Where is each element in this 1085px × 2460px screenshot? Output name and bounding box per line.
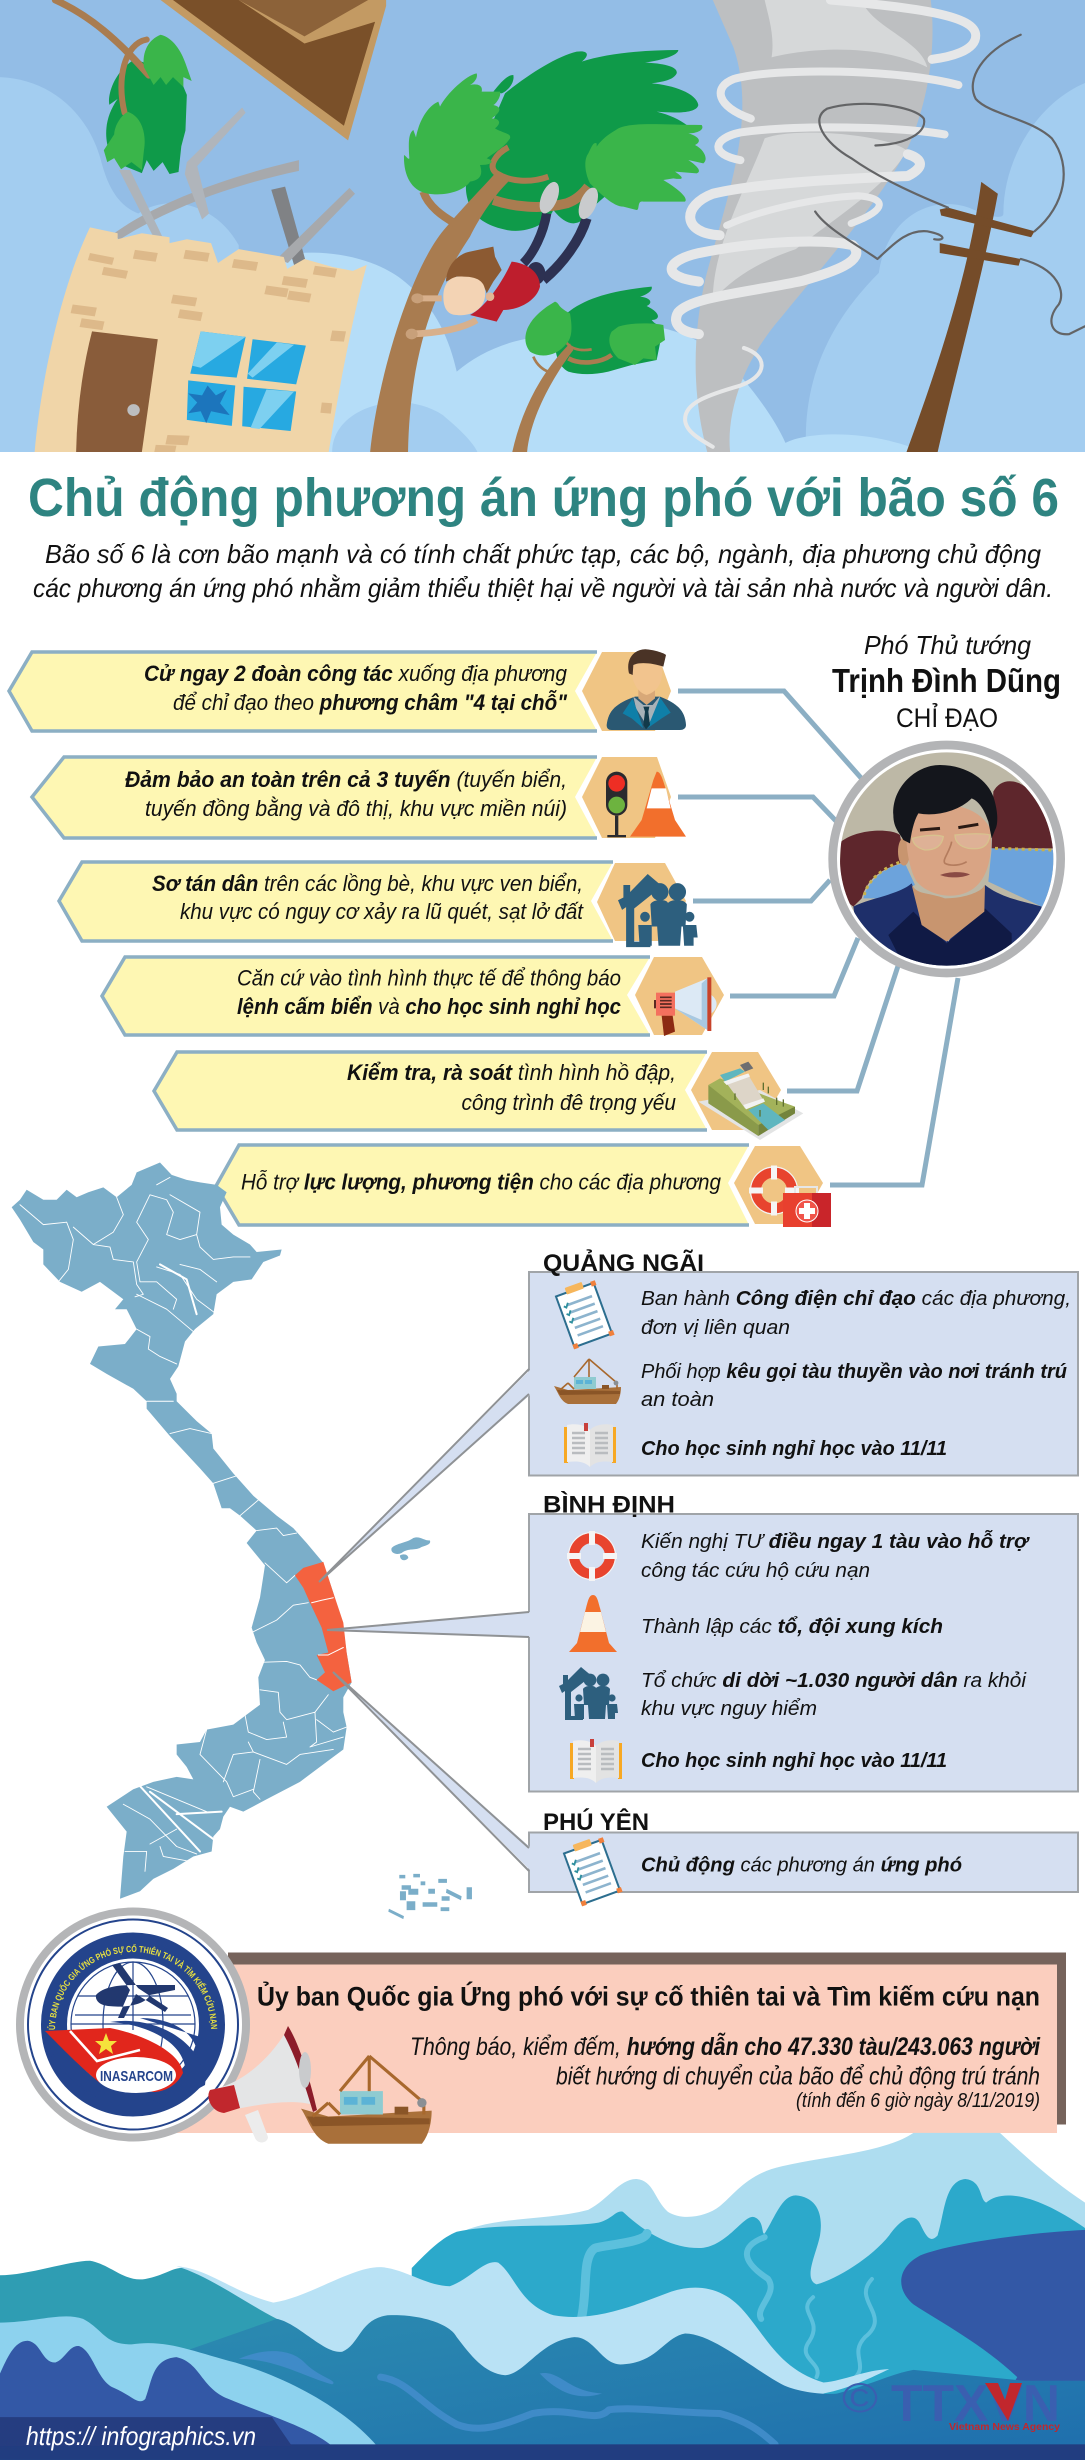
heading: BÌNH ĐỊNH (543, 1490, 675, 1518)
red flag (45, 2028, 183, 2092)
province: Bình Định: công tác cứu hộ cứu nạn (641, 1559, 870, 1582)
province: Bình Định: Thành lập các tổ, đội xung kích (641, 1615, 943, 1638)
Mekong and Red river arms (138, 1264, 222, 1851)
icon: book (570, 1739, 622, 1783)
foam swirls (581, 2234, 875, 2381)
map of Vietnam (12, 1162, 472, 1919)
province: Phú Yên (333, 1672, 1078, 1906)
committee panel (173, 1952, 1066, 2133)
front light wave (176, 2262, 889, 2460)
hexagon (597, 863, 686, 941)
deputy PM heading (832, 630, 1061, 733)
text: Cử ngay 2 đoàn công tác xuống địa phương (144, 661, 567, 686)
action 3 (59, 862, 698, 947)
icon: checklist (553, 1277, 615, 1349)
islands south (388, 1874, 472, 1919)
text: Hỗ trợ lực lượng, phương tiện cho các địa phương (241, 1170, 721, 1194)
helicopter (96, 1963, 175, 2018)
loose wires (815, 35, 1085, 334)
icon: checklist (561, 1834, 623, 1906)
flag stripe (70, 2031, 140, 2061)
info box (529, 1832, 1078, 1892)
broken house (35, 227, 367, 452)
flying roof (161, 0, 386, 140)
action 5 (154, 1052, 803, 1140)
province: Quảng Ngãi: đơn vị liên quan (641, 1316, 790, 1339)
committee panel: (tính đến 6 giờ ngày 8/11/2019) (796, 2090, 1040, 2112)
text: Căn cứ vào tình hình thực tế để thông báo (237, 966, 621, 990)
action 4: lệnh cấm biển và cho học sinh nghỉ học (237, 994, 621, 1019)
utility pole (907, 182, 1035, 452)
icon: family (559, 1667, 618, 1720)
falling person (406, 179, 602, 339)
icon: dam (698, 1062, 803, 1140)
callout wedge (319, 1369, 531, 1582)
left dark wave (0, 2341, 332, 2446)
deputy PM heading: CHỈ ĐẠO (896, 701, 998, 733)
islands north (391, 1537, 430, 1560)
front deep wave (173, 2315, 1085, 2460)
icon: boat (554, 1359, 621, 1404)
dark blue bay (901, 2230, 1085, 2460)
tree: upper left (55, 0, 192, 174)
TTXVN watermark: TTXVN (891, 2375, 1060, 2433)
icon: first aid kit (783, 1187, 831, 1227)
action 1 (9, 649, 686, 731)
icon: family and house (618, 874, 698, 947)
text: Ban hành Công điện chỉ đạo các địa phương, (641, 1287, 1071, 1310)
emblem name: INASARCOM (100, 2068, 173, 2085)
text: Sơ tán dân trên các lồng bè, khu vực ven biển, (152, 871, 583, 896)
province: Quảng Ngãi (319, 1248, 1078, 1582)
clouds (0, 77, 1085, 452)
left teal wave (0, 2261, 346, 2460)
emblem circular text: ỦY BAN QUỐC GIA ỨNG PHÓ SỰ CỐ THIÊN TAI VÀ TÌM KIẾM CỨU NẠN (47, 1944, 218, 2030)
callout wedge (327, 1612, 531, 1637)
hexagon (691, 1052, 781, 1130)
heading: QUẢNG NGÃI (543, 1248, 704, 1277)
icon: official (607, 649, 686, 730)
deputy PM heading: Trịnh Đình Dũng (832, 662, 1061, 699)
highlighted province borders (312, 1598, 343, 1655)
icon: cone (569, 1595, 617, 1652)
hexagon (734, 1146, 823, 1224)
deep swirls (239, 2351, 775, 2444)
yellow star (95, 2033, 117, 2054)
back light wave (415, 2133, 1085, 2460)
action 6 (216, 1145, 831, 1227)
action 3: khu vực có nguy cơ xảy ra lũ quét, sạt lở đất (180, 899, 585, 924)
banner shape (154, 1052, 707, 1130)
province: Quảng Ngãi: an toàn (641, 1388, 714, 1411)
heading: PHÚ YÊN (543, 1808, 649, 1836)
panel body (173, 1964, 1057, 2133)
hero storm illustration (0, 0, 1085, 453)
connector lines to deputy PM (678, 691, 958, 1185)
deputy PM heading: Phó Thủ tướng (864, 630, 1032, 660)
panel shadow band (228, 1952, 1066, 2124)
province: Bình Định (327, 1490, 1078, 1792)
white oval (96, 2057, 176, 2093)
action 5: công trình đê trọng yếu (462, 1090, 676, 1115)
text: Chủ động các phương án ứng phó (641, 1854, 962, 1876)
highlighted provinces (295, 1562, 352, 1691)
INASARCOM emblem (16, 1908, 250, 2142)
hexagon (582, 757, 671, 838)
bottom bar (0, 2444, 1085, 2460)
banner shape (32, 757, 597, 838)
banner shape (59, 862, 613, 941)
tree: large (370, 50, 706, 453)
text: Đảm bảo an toàn trên cả 3 tuyến (tuyến biển, (125, 767, 567, 792)
lower swoosh ring (45, 2018, 210, 2115)
text: Kiến nghị TƯ điều ngay 1 tàu vào hỗ trợ (641, 1530, 1030, 1553)
icon: megaphone (654, 977, 717, 1036)
banner shape (102, 957, 650, 1035)
hexagon (582, 652, 671, 731)
banner shape (9, 652, 597, 731)
intro text (33, 539, 1053, 603)
info box (529, 1514, 1078, 1792)
tree: small (512, 287, 665, 453)
map landmass (12, 1162, 352, 1899)
banner shape (216, 1145, 749, 1225)
text: Ủy ban Quốc gia Ứng phó với sự cố thiên tai và Tìm kiếm cứu nạn (257, 1980, 1040, 2012)
action 1: để chỉ đạo theo phương châm "4 tại chỗ" (173, 690, 567, 715)
callout wedge (333, 1672, 531, 1871)
sky (0, 0, 1085, 452)
portrait of deputy PM (833, 745, 1062, 975)
icon: megaphone (208, 2026, 317, 2142)
province borders (20, 1177, 347, 1871)
upper swoosh (110, 2021, 201, 2108)
intro text: Bão số 6 là cơn bão mạnh và có tính chất phức tạp, các bộ, ngành, địa phương chủ động (45, 539, 1042, 569)
TTXVN watermark: © (842, 2374, 878, 2421)
icon: lifebuoy (567, 1531, 617, 1581)
URL tab (0, 2417, 292, 2446)
province: Quảng Ngãi: Phối hợp kêu gọi tàu thuyền vào nơi tránh trú (641, 1360, 1067, 1383)
mid blue wave (412, 2179, 1085, 2460)
icon: fishing boat (301, 2056, 432, 2144)
text: Kiểm tra, rà soát tình hình hồ đập, (347, 1060, 676, 1085)
globe (70, 1961, 196, 2065)
province: Quảng Ngãi: Cho học sinh nghỉ học vào 11/11 (641, 1437, 947, 1460)
province: Bình Định: Cho học sinh nghỉ học vào 11/11 (641, 1749, 947, 1772)
hexagon (635, 957, 724, 1035)
info box (529, 1272, 1078, 1476)
sea waves (0, 2133, 1085, 2460)
action 2 (32, 757, 686, 838)
province: Bình Định: Tổ chức di dời ~1.030 người dân ra khỏi (641, 1669, 1027, 1692)
debris (114, 108, 355, 272)
TTXVN watermark: Vietnam News Agency (949, 2421, 1060, 2433)
action 4 (102, 957, 724, 1036)
province: Bình Định: khu vực nguy hiểm (641, 1697, 817, 1720)
windblown trees and falling person (370, 50, 706, 453)
icon: book (564, 1423, 616, 1467)
left light band (0, 2316, 377, 2446)
tornado (672, 0, 976, 452)
icon: lifebuoy (749, 1166, 799, 1216)
icon: traffic light and cone (606, 772, 686, 837)
action 2: tuyến đồng bằng và đô thị, khu vực miền núi) (145, 796, 567, 821)
URL text: https:// infographics.vn (26, 2421, 256, 2451)
